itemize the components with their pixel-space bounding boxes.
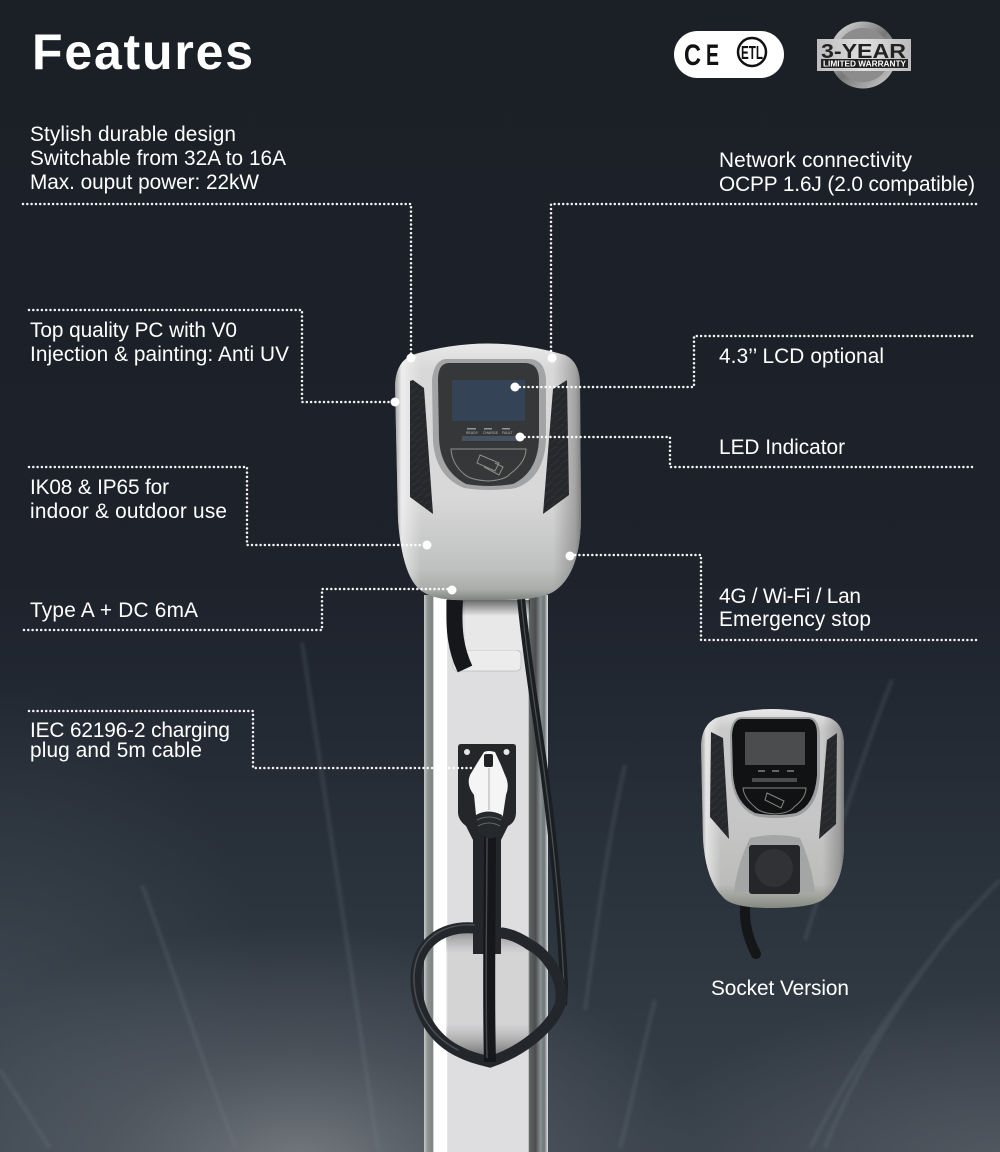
feature text: plug and cable	[30, 719, 230, 762]
status indicators	[462, 428, 522, 441]
socket charger cable	[745, 905, 756, 954]
left cable into slot	[454, 600, 465, 669]
feature text: design and power: Max. ouput power: 22kW	[30, 171, 259, 194]
charging plug	[469, 751, 508, 838]
callout leader lines	[23, 204, 976, 768]
feature text: protection rating: indoor & outdoor use	[30, 500, 227, 523]
feature text: network: Network connectivity	[719, 149, 913, 172]
pedestal pole	[424, 595, 548, 1152]
certification badge: CE and ETL	[674, 31, 784, 78]
status indicators: FAULT	[502, 431, 513, 435]
coiled cable	[414, 925, 561, 1062]
warranty badge: LIMITED WARRANTY	[823, 58, 906, 68]
vertical cable from plug	[486, 826, 490, 1062]
socket charger vents	[710, 732, 837, 839]
right cable to loop	[521, 598, 564, 1005]
socket outlet	[734, 835, 815, 894]
feature text: design and power	[30, 123, 286, 194]
feature text: protection rating: IK08 & IP65 for	[30, 476, 169, 499]
certification badge: CE and ETL: ETL	[741, 43, 763, 63]
feature text: protection rating	[30, 476, 227, 523]
control panel	[432, 359, 546, 490]
feature text: residual current: Type A + DC 6mA	[30, 599, 198, 622]
feature text: material	[30, 319, 289, 366]
connector holster plate	[458, 744, 516, 954]
status indicators: READY	[466, 431, 479, 435]
wall charger on pedestal	[395, 344, 581, 1152]
warranty badge	[817, 22, 911, 88]
certification badge: CE and ETL: E	[706, 39, 719, 72]
feature text: network: OCPP 1.6J (2.0 compatible)	[719, 173, 975, 196]
certification badge: CE and ETL: C	[684, 39, 701, 72]
socket charger body	[701, 709, 844, 908]
feature text: connectivity and stop: 4G / Wi-Fi / Lan	[719, 585, 861, 608]
feature text: design and power: Switchable from 32A to 16A	[30, 147, 286, 170]
feature text: LCD: 4.3’’ LCD optional	[719, 345, 884, 368]
feature text: plug and cable: IEC 62196-2 charging	[30, 719, 230, 742]
feature text: connectivity and stop: Emergency stop	[719, 608, 871, 631]
socket charger panel	[730, 717, 820, 818]
feature text: material: Top quality PC with V0	[30, 319, 237, 342]
feature text: plug and cable: plug and 5m cable	[30, 739, 202, 762]
side vents	[410, 380, 569, 514]
warranty badge: 3-YEAR	[821, 41, 907, 63]
cable holster slot	[446, 600, 530, 671]
LCD screen	[452, 380, 525, 421]
feature text: network	[719, 149, 975, 196]
status indicators: CHARGE	[483, 431, 499, 435]
charger body	[395, 344, 581, 600]
socket version charger	[701, 709, 844, 954]
RFID reader	[451, 449, 526, 481]
socket version caption: Socket Version	[711, 977, 849, 1000]
title: Features	[32, 24, 253, 80]
feature text: LED: LED Indicator	[719, 436, 845, 459]
feature text: connectivity and stop	[719, 585, 871, 631]
feature text: material: Injection & painting: Anti UV	[30, 343, 289, 366]
feature text: design and power: Stylish durable design	[30, 123, 236, 146]
